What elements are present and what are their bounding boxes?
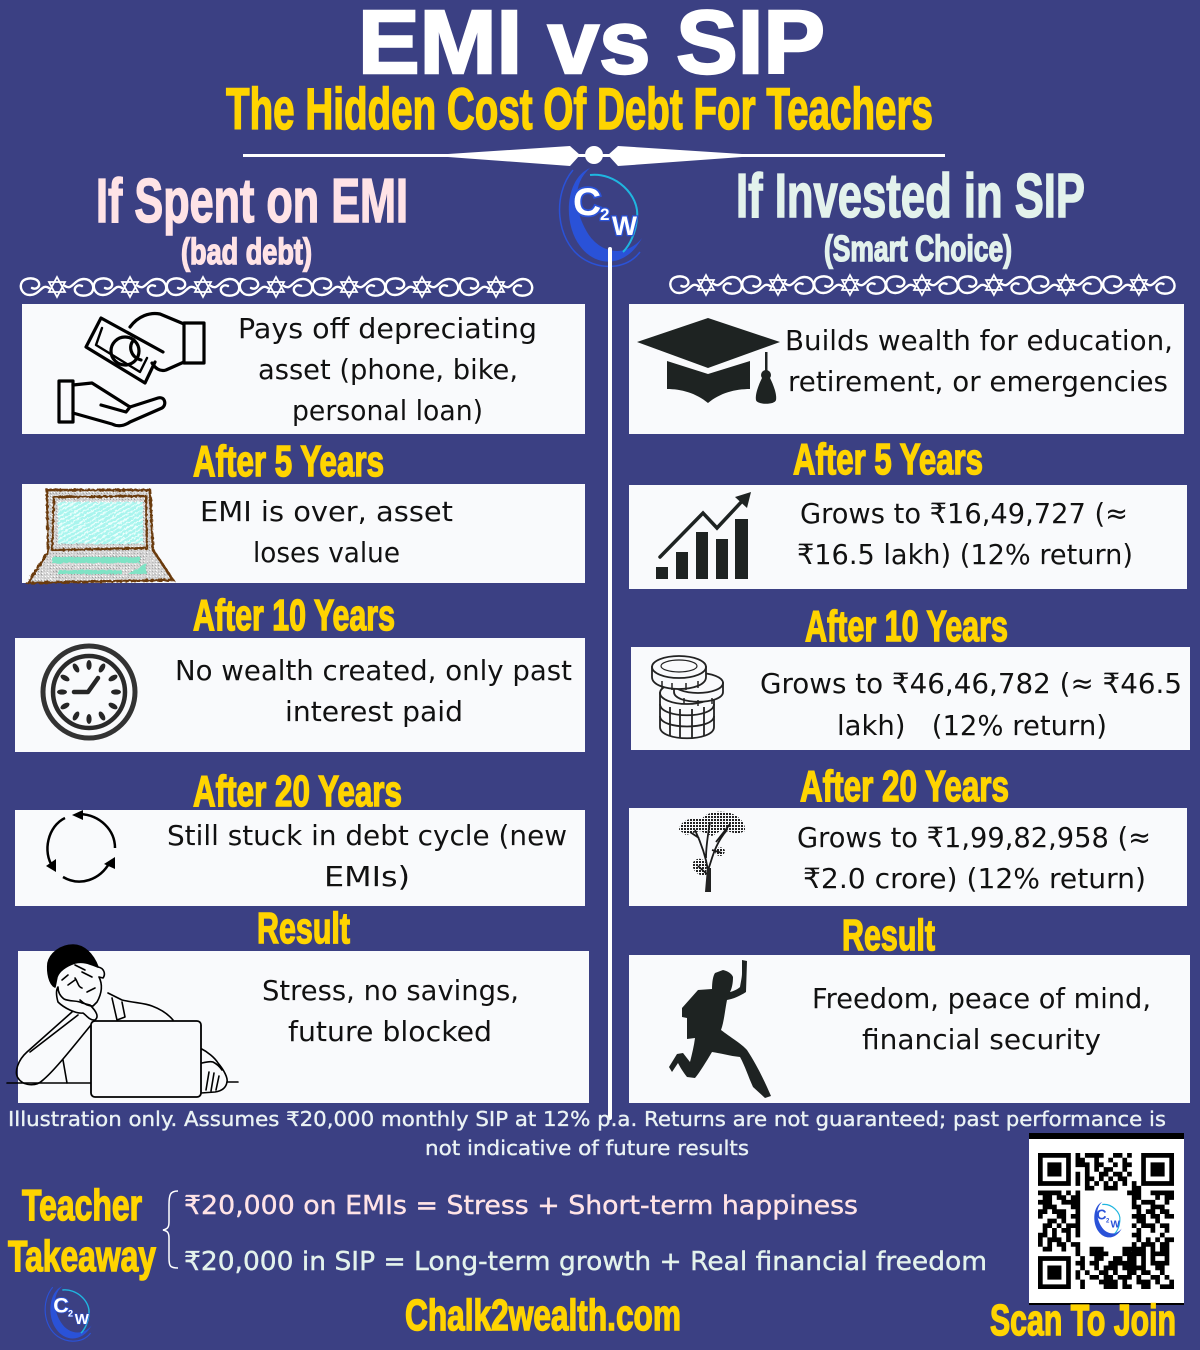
panel: EMI is over [22,484,585,583]
panel: EMI is over: EMI is over, asset [200,495,453,528]
teacher takeaway label: Takeaway [8,1232,156,1281]
disclaimer [8,1107,1166,1160]
icon: coin stacks [652,656,723,738]
panel: grows to 46.5 lakh [631,647,1190,750]
logo: C2W main: 2 [600,205,609,224]
teacher takeaway label: Teacher [22,1181,142,1230]
panel: grows to 2 crore [629,808,1187,906]
panel: result stress: future blocked [288,1015,492,1048]
ornament left [21,277,532,297]
panel: no wealth created: interest paid [285,695,463,728]
panel: result freedom: Freedom, peace of mind, [812,982,1151,1015]
icon: clock [43,646,135,738]
logo: small footer: C [53,1293,69,1317]
logo: QR center: 2 [1106,1218,1110,1224]
QR code [1029,1133,1184,1305]
icon: growth chart [656,492,751,579]
icon: cycle arrows [46,810,115,882]
panel: grows to 2 crore: Grows to ₹1,99,82,958 (≈ [797,821,1151,854]
panel: result stress: Stress, no savings, [262,974,519,1007]
panel: no wealth created [15,638,585,752]
panel: grows to 16.5 lakh: ₹16.5 lakh) (12% return) [797,538,1133,571]
panel: result freedom [629,955,1190,1103]
panel: EMI is over: loses value [253,536,400,569]
website: Chalk2wealth.com [405,1291,681,1340]
panel: pays off depreciating asset: personal loan) [292,394,483,427]
icon: stressed man at laptop [7,945,238,1097]
panel: grows to 16.5 lakh [629,485,1187,589]
panel: grows to 2 crore: ₹2.0 crore) (12% return) [803,862,1146,895]
logo: small footer [45,1286,92,1341]
takeaway lines [184,1191,987,1277]
heading: result left: Result [257,904,350,953]
icon: tree [679,812,745,892]
takeaway lines: ₹20,000 on EMIs = Stress + Short-term happiness [184,1191,858,1221]
heading: after 10 years right: After 10 Years [805,602,1008,651]
takeaway lines: ₹20,000 in SIP = Long-term growth + Real financial freedom [184,1247,987,1277]
panel: grows to 16.5 lakh: Grows to ₹16,49,727 (≈ [800,497,1128,530]
panel: debt cycle: EMIs) [324,860,410,893]
ornament right [670,275,1174,295]
panel: grows to 46.5 lakh: lakh) (12% return) [837,709,1107,742]
logo: C2W main: C [573,181,601,224]
disclaimer: Illustration only. Assumes ₹20,000 monthly SIP at 12% p.a. Returns are not guaranteed; past performance is [8,1107,1166,1131]
panel: pays off depreciating asset: asset (phone, bike, [258,353,518,386]
heading: result right: Result [842,911,935,960]
logo: small footer: 2 [68,1308,73,1318]
heading: left column: If Spent on EMI [96,167,408,236]
panel: result stress [7,945,589,1103]
logo: C2W main: W [612,211,638,241]
panel: result freedom: financial security [862,1023,1101,1056]
icon: graduation cap [637,318,780,404]
heading: after 20 years left: After 20 Years [193,767,402,816]
logo: QR center: W [1110,1220,1121,1231]
heading: right column: (Smart Choice) [824,228,1012,269]
heading: left column [96,167,408,272]
panel: pays off depreciating asset [22,304,585,434]
icon: money changing hands [59,314,204,426]
heading: after 5 years right: After 5 Years [793,435,983,484]
heading: after 10 years left: After 10 Years [193,591,395,640]
heading: after 5 years left: After 5 Years [193,437,384,486]
logo: C2W main [560,168,642,266]
heading: right column [736,162,1085,269]
teacher takeaway label [8,1181,156,1281]
icon: jumping person [669,960,771,1098]
title divider [243,146,945,166]
panel: debt cycle: Still stuck in debt cycle (new [167,819,567,852]
panel: builds wealth: retirement, or emergencies [788,365,1168,398]
panel: grows to 46.5 lakh: Grows to ₹46,46,782 (≈ ₹46.5 [760,667,1182,700]
logo: QR center [1094,1202,1122,1237]
disclaimer: not indicative of future results [425,1136,749,1160]
heading: left column: (bad debt) [181,231,312,272]
icon: sketched laptop [28,490,173,583]
panel: no wealth created: No wealth created, only past [175,654,572,687]
panel: debt cycle [15,810,585,906]
logo: QR center: C [1096,1208,1107,1224]
panel: pays off depreciating asset: Pays off depreciating [238,312,537,345]
logo: small footer: W [75,1312,89,1328]
panel: builds wealth: Builds wealth for education, [785,324,1173,357]
center divider line [608,247,612,1120]
heading: after 20 years right: After 20 Years [800,762,1009,811]
brace [163,1191,178,1268]
panel: builds wealth [629,304,1184,434]
